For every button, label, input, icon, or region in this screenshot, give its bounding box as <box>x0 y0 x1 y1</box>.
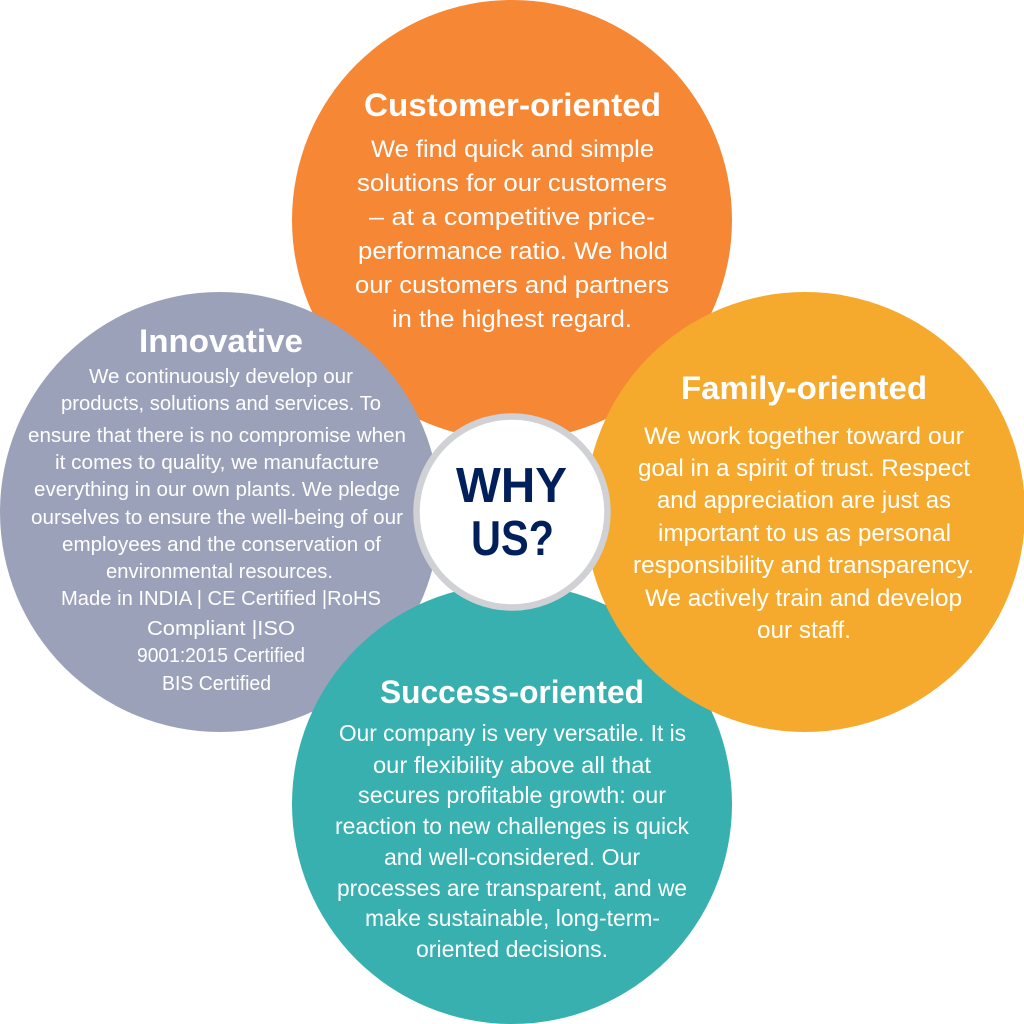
heading: why us <box>456 459 567 566</box>
text: certifications: BIS Certified <box>162 672 271 695</box>
heading: success-oriented: Success-oriented <box>380 674 644 710</box>
text: family-oriented body: goal in a spirit of trust. Respect <box>638 455 970 482</box>
text: certifications: Made in INDIA | CE Certified |RoHS <box>61 587 381 610</box>
text: success-oriented body: oriented decisions. <box>416 936 608 962</box>
text: innovative body: employees and the conservation of <box>62 533 381 556</box>
heading: why us: US? <box>471 512 554 566</box>
panel: customer-oriented <box>292 0 732 440</box>
heading: why us: WHY <box>456 459 567 513</box>
text: family-oriented body: important to us as personal <box>658 520 951 547</box>
text: certifications: Compliant |ISO <box>147 617 295 640</box>
text: innovative body <box>28 365 406 583</box>
text: success-oriented body: our flexibility above all that <box>373 752 651 778</box>
center badge: why us <box>416 416 608 608</box>
text: customer-oriented body: – at a competitive price- <box>369 204 655 231</box>
text: family-oriented body: We work together toward our <box>644 423 964 450</box>
text: customer-oriented body: our customers and partners <box>355 272 669 299</box>
text: customer-oriented body: performance ratio. We hold <box>358 238 668 265</box>
text: success-oriented body: secures profitable growth: our <box>358 782 666 808</box>
panel: success-oriented <box>292 584 732 1024</box>
text: certifications <box>61 587 381 695</box>
text: family-oriented body: and appreciation are just as <box>657 487 951 514</box>
text: family-oriented body: our staff. <box>757 617 851 644</box>
text: innovative body: products, solutions and services. To <box>61 392 381 415</box>
text: innovative body: ourselves to ensure the well-being of our <box>31 506 403 529</box>
text: innovative body: ensure that there is no compromise when <box>28 424 406 447</box>
text: family-oriented body <box>633 423 974 644</box>
text: success-oriented body: Our company is very versatile. It is <box>339 720 686 746</box>
text: certifications: 9001:2015 Certified <box>137 644 305 667</box>
text: innovative body: everything in our own plants. We pledge <box>34 478 400 501</box>
text: customer-oriented body: solutions for our customers <box>357 170 667 197</box>
heading: innovative: Innovative <box>139 323 303 359</box>
text: innovative body: We continuously develop our <box>89 365 353 388</box>
text: innovative body: it comes to quality, we manufacture <box>55 451 379 474</box>
text: innovative body: environmental resources. <box>106 560 333 583</box>
text: customer-oriented body: We find quick and simple <box>371 136 654 163</box>
text: success-oriented body: and well-considered. Our <box>384 844 640 870</box>
heading: family-oriented: Family-oriented <box>681 370 927 406</box>
text: success-oriented body: make sustainable, long-term- <box>365 905 660 931</box>
panel: family-oriented <box>585 292 1024 732</box>
text: success-oriented body: reaction to new challenges is quick <box>335 813 689 839</box>
text: customer-oriented body: in the highest regard. <box>392 306 632 333</box>
panel: innovative <box>0 292 440 732</box>
text: success-oriented body <box>335 720 689 962</box>
text: family-oriented body: responsibility and transparency. <box>633 552 974 579</box>
text: customer-oriented body <box>355 136 669 333</box>
heading: customer-oriented: Customer-oriented <box>364 87 661 123</box>
text: success-oriented body: processes are transparent, and we <box>337 875 687 901</box>
text: family-oriented body: We actively train and develop <box>645 585 962 612</box>
